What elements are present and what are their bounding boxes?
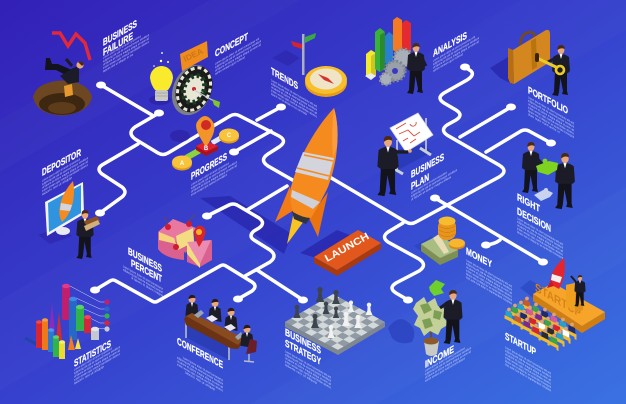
- text block: business failure: Lorem ipsum dolor sit amet consectetur: [103, 34, 142, 60]
- icon: analyst: [407, 43, 426, 94]
- icon: pit: [33, 80, 92, 116]
- text block: startup: duis aute irure dolor in reprehenderit voluptate: [505, 362, 551, 393]
- text block: business plan: ut labore et dolore magna aliqua: [411, 175, 451, 202]
- text block: business failure: laboris nisi ut aliquip ex ea: [103, 52, 133, 74]
- text block: analysis: ut labore et dolore magna aliqua ut enim ad: [433, 39, 479, 70]
- text block: business failure: ut labore et dolore magna aliqua ut enim ad: [103, 36, 149, 67]
- text block: money: duis aute irure dolor in reprehenderit voluptate: [466, 275, 512, 306]
- heading: business failure: BUSINESS: [103, 18, 137, 49]
- text block: progress: ut labore et dolore magna aliqua ut enim ad: [191, 163, 237, 194]
- text block: money: minim veniam quis nostrud exercitation ullamco: [466, 268, 512, 299]
- icon: rocket: [275, 108, 338, 244]
- text block: statistics: laboris nisi ut aliquip: [74, 364, 104, 386]
- text block: right decision: ut labore et dolore magna aliqua ut enim ad: [517, 223, 563, 253]
- text block: progress: Lorem ipsum dolor sit amet consectetur: [191, 161, 230, 187]
- text block: conference: minim veniam quis nostrud exercitation ullamco: [177, 362, 223, 393]
- heading: concept: CONCEPT: [215, 31, 248, 60]
- ground shadows: [200, 57, 512, 258]
- text block: conference: laboris nisi ut aliquip: [185, 370, 215, 392]
- icon: red rocket: [547, 258, 565, 289]
- text block: income: adipiscing elit sed do eiusmod tempor incididunt: [425, 346, 471, 376]
- text block: trends: minim veniam quis nostrud exercitation ullamco: [271, 88, 317, 119]
- text block: business plan: Lorem ipsum dolor sit amet consectetur: [411, 170, 448, 195]
- text block: business percent: ut labore et dolore magna: [131, 276, 163, 298]
- icon: signpost: [272, 33, 316, 75]
- icon: speaker: [571, 275, 586, 307]
- text block: portfolio: Lorem ipsum dolor sit amet consectetur elit sed: [528, 95, 574, 126]
- heading: right decision: [517, 192, 551, 235]
- text block: money: [466, 258, 512, 306]
- heading: business strategy: BUSINESS: [285, 327, 321, 357]
- text block: portfolio: minim veniam quis nostrud exercitation ullamco: [528, 105, 574, 136]
- heading: business plan: PLAN: [411, 172, 429, 193]
- heading: business percent: [128, 246, 162, 285]
- icon: two businessmen with puzzle: [522, 142, 575, 209]
- text block: analysis: adipiscing elit sed do eiusmod tempor incididunt: [433, 36, 479, 66]
- text block: conference: ut labore et dolore magna aliqua ut enim ad: [177, 359, 223, 389]
- text block: depositor: adipiscing elit sed do eiusmod tempor incididunt: [42, 156, 88, 186]
- icon: abc steps: [170, 116, 239, 170]
- text block: statistics: Lorem ipsum dolor sit amet consectetur: [74, 346, 113, 372]
- icon: dartboard: [165, 59, 220, 121]
- text block: money: laboris nisi ut aliquip ex ea commodo consequat: [466, 272, 512, 302]
- panel: business plan: [377, 113, 457, 202]
- text block: business strategy: minim veniam quis nostrud exercitation ullamco: [285, 359, 331, 390]
- panel: business failure: [33, 18, 149, 115]
- text block: startup: laboris nisi ut aliquip ex ea commodo consequat: [505, 359, 551, 389]
- panel: statistics: [25, 284, 120, 386]
- icon: whiteboard: [390, 113, 433, 174]
- text block: right decision: minim veniam quis nostrud exercitation ullamco: [517, 226, 563, 257]
- text block: startup: Lorem ipsum dolor sit amet consectetur elit sed: [505, 345, 551, 376]
- icon: bar chart: [365, 17, 411, 80]
- icon: meeting table: [184, 295, 257, 362]
- text block: trends: Lorem ipsum dolor sit amet consectetur elit sed: [271, 78, 317, 109]
- icon: falling chart arrow: [52, 33, 90, 60]
- heading: right decision: DECISION: [517, 206, 551, 235]
- heading: depositor: DEPOSITOR: [42, 147, 81, 179]
- text block: right decision: adipiscing elit sed do eiusmod tempor incididunt: [517, 220, 563, 250]
- heading: business failure: FAILURE: [103, 30, 133, 59]
- text block: concept: Lorem ipsum dolor sit amet consectetur elit: [215, 37, 259, 66]
- text block: conference: Lorem ipsum dolor sit amet consectetur: [183, 356, 224, 383]
- heading: statistics: STATISTICS: [74, 338, 111, 370]
- icon: launch button: LAUNCH: [323, 231, 371, 265]
- text block: business strategy: laboris nisi ut aliquip: [285, 363, 317, 385]
- text block: concept: [215, 36, 261, 76]
- heading: business strategy: [285, 327, 321, 368]
- panel: startup: [504, 258, 605, 393]
- heading: business plan: BUSINESS: [411, 151, 444, 181]
- icon: money tree: [388, 280, 449, 356]
- heading: analysis: ANALYSIS: [433, 30, 467, 60]
- text block: right decision: Lorem ipsum dolor sit amet consectetur elit sed: [517, 216, 563, 247]
- heading: income: INCOME: [425, 344, 454, 371]
- panel: portfolio: [508, 30, 574, 143]
- panel: rocket launch: [275, 108, 381, 276]
- icon: chess board: [285, 287, 385, 355]
- icon: 3d cylinder chart: [25, 284, 110, 359]
- text block: money: Lorem ipsum dolor sit amet consectetur elit sed: [466, 258, 512, 289]
- text block: money: ut labore et dolore magna aliqua ut enim ad: [466, 265, 512, 295]
- icon: audience: [504, 297, 576, 351]
- icon: falling businessman: [45, 58, 84, 97]
- text block: business failure: adipiscing elit sed do eiusmod tempor incididunt: [103, 33, 149, 63]
- text block: business percent: [123, 264, 164, 298]
- text block: business percent: Lorem ipsum dolor sit amet consectetur: [123, 264, 164, 291]
- text block: statistics: [74, 342, 120, 386]
- text block: business strategy: ut labore et dolore magna aliqua ut enim ad: [285, 356, 331, 386]
- icon: presenter: [377, 136, 412, 196]
- text block: depositor: Lorem ipsum dolor sit amet consectetur: [42, 157, 81, 183]
- text block: portfolio: [528, 95, 574, 143]
- panel: business strategy: [285, 287, 385, 393]
- text block: depositor: laboris nisi ut aliquip: [42, 175, 72, 197]
- icon: launch button: [314, 230, 381, 276]
- heading: money: MONEY: [466, 246, 492, 271]
- text block: startup: [505, 345, 551, 393]
- text block: portfolio: ut labore et dolore magna aliqua ut enim ad: [528, 102, 574, 132]
- text block: right decision: laboris nisi ut aliquip ex ea commodo consequat: [517, 230, 563, 260]
- flow pipes: [90, 64, 556, 304]
- icon: light bulb: [149, 52, 173, 105]
- text block: progress: adipiscing elit sed do eiusmod tempor incididunt: [191, 160, 237, 190]
- icon: cash and coins: [414, 216, 465, 265]
- panel: progress: [170, 116, 239, 197]
- text block: analysis: minim veniam quis nostrud: [433, 52, 463, 73]
- text block: statistics: ut labore et dolore magna aliqua ut enim ad: [74, 348, 120, 379]
- text block: income: minim veniam quis nostrud exercitation: [425, 356, 465, 383]
- text block: business strategy: Lorem ipsum dolor sit amet consectetur elit sed: [285, 349, 331, 380]
- heading: business strategy: STRATEGY: [285, 338, 321, 368]
- heading: conference: CONFERENCE: [177, 336, 223, 371]
- text block: business strategy: adipiscing elit sed do eiusmod tempor incididunt: [285, 353, 331, 383]
- text block: trends: laboris nisi ut aliquip ex ea commodo: [271, 92, 307, 116]
- text block: analysis: [433, 33, 479, 73]
- text block: business failure: minim veniam quis nostrud exercitation ullamco: [103, 40, 149, 70]
- icon: suitcase: [508, 30, 550, 84]
- text block: money: adipiscing elit sed do eiusmod tempor incididunt: [466, 262, 512, 292]
- icon: compass: [305, 66, 347, 97]
- text block: startup: minim veniam quis nostrud exercitation ullamco: [505, 355, 551, 386]
- text block: portfolio: duis aute irure dolor in: [528, 112, 560, 134]
- text block: business percent: adipiscing elit sed do eiusmod tempor: [123, 268, 164, 295]
- panel: conference: [177, 295, 257, 396]
- heading: business percent: PERCENT: [131, 258, 162, 285]
- heading: right decision: RIGHT: [517, 192, 540, 215]
- icon: abc steps: A: [180, 161, 185, 167]
- panel: business percent: [123, 214, 212, 298]
- heading: business plan: [411, 151, 444, 193]
- icon: man with books: [76, 210, 100, 259]
- icon: investor: [440, 290, 463, 344]
- text block: right decision: [517, 216, 563, 260]
- text block: depositor: minim veniam quis nostrud exercitation ullamco: [42, 163, 88, 193]
- icon: gears: [380, 49, 412, 85]
- text block: portfolio: laboris nisi ut aliquip ex ea commodo consequat: [528, 109, 574, 139]
- panel: money: [414, 216, 512, 306]
- text block: concept: adipiscing elit sed do eiusmod tempor incididunt: [215, 39, 261, 69]
- text block: portfolio: adipiscing elit sed do eiusmod tempor incididunt: [528, 99, 574, 129]
- icon: monitor with rocket: [38, 181, 84, 244]
- heading: startup: STARTUP: [505, 331, 536, 358]
- text block: income: ut labore et dolore magna aliqua ut enim ad: [425, 349, 471, 380]
- text block: analysis: Lorem ipsum dolor sit amet consectetur elit: [433, 35, 475, 63]
- panel: right decision: [517, 142, 575, 260]
- text block: statistics: adipiscing elit sed do eiusmod tempor incididunt: [74, 345, 120, 375]
- icon: idea sign: IDEA: [182, 46, 205, 64]
- text block: business failure: [103, 30, 149, 74]
- icon: abc steps: C: [227, 133, 232, 139]
- icon: abc steps: B: [204, 146, 209, 152]
- panel: concept: [149, 31, 261, 121]
- icon: cake chart: [158, 214, 212, 268]
- panel: trends: [271, 33, 347, 122]
- heading: progress: PROGRESS: [191, 151, 227, 183]
- text block: concept: minim veniam quis nostrud: [215, 55, 245, 76]
- panel: depositor: [38, 147, 100, 259]
- text block: depositor: ut labore et dolore magna aliqua ut enim ad: [42, 159, 88, 190]
- text block: trends: [271, 78, 317, 122]
- text block: trends: ut labore et dolore magna aliqua ut enim ad: [271, 85, 317, 115]
- heading: trends: TRENDS: [271, 66, 298, 92]
- text block: conference: [177, 352, 224, 396]
- panel: income: [388, 280, 471, 383]
- text block: statistics: minim veniam quis nostrud exercitation ullamco: [74, 352, 120, 382]
- text block: startup: ut labore et dolore magna aliqua ut enim ad: [505, 352, 551, 382]
- text block: business plan: adipiscing elit sed do eiusmod tempor incididunt: [411, 168, 457, 198]
- text block: business strategy: [285, 349, 331, 393]
- text block: conference: adipiscing elit sed do eiusmod tempor incididunt: [177, 356, 223, 386]
- text block: trends: adipiscing elit sed do eiusmod tempor incididunt: [271, 82, 317, 112]
- heading: portfolio: PORTFOLIO: [528, 85, 568, 117]
- text block: concept: ut labore et dolore magna aliqua ut enim ad: [215, 42, 261, 73]
- text block: depositor: [42, 153, 88, 197]
- icon: businessman with key: [535, 45, 570, 96]
- heading: business percent: BUSINESS: [128, 246, 162, 275]
- icon: stage: STARTUP: [535, 280, 581, 320]
- panel: analysis: [365, 17, 479, 94]
- text block: progress: minim veniam quis nostrud exercitation: [191, 173, 227, 197]
- text block: income: Lorem ipsum dolor sit amet consectetur: [425, 346, 466, 373]
- text block: startup: adipiscing elit sed do eiusmod tempor incididunt: [505, 349, 551, 379]
